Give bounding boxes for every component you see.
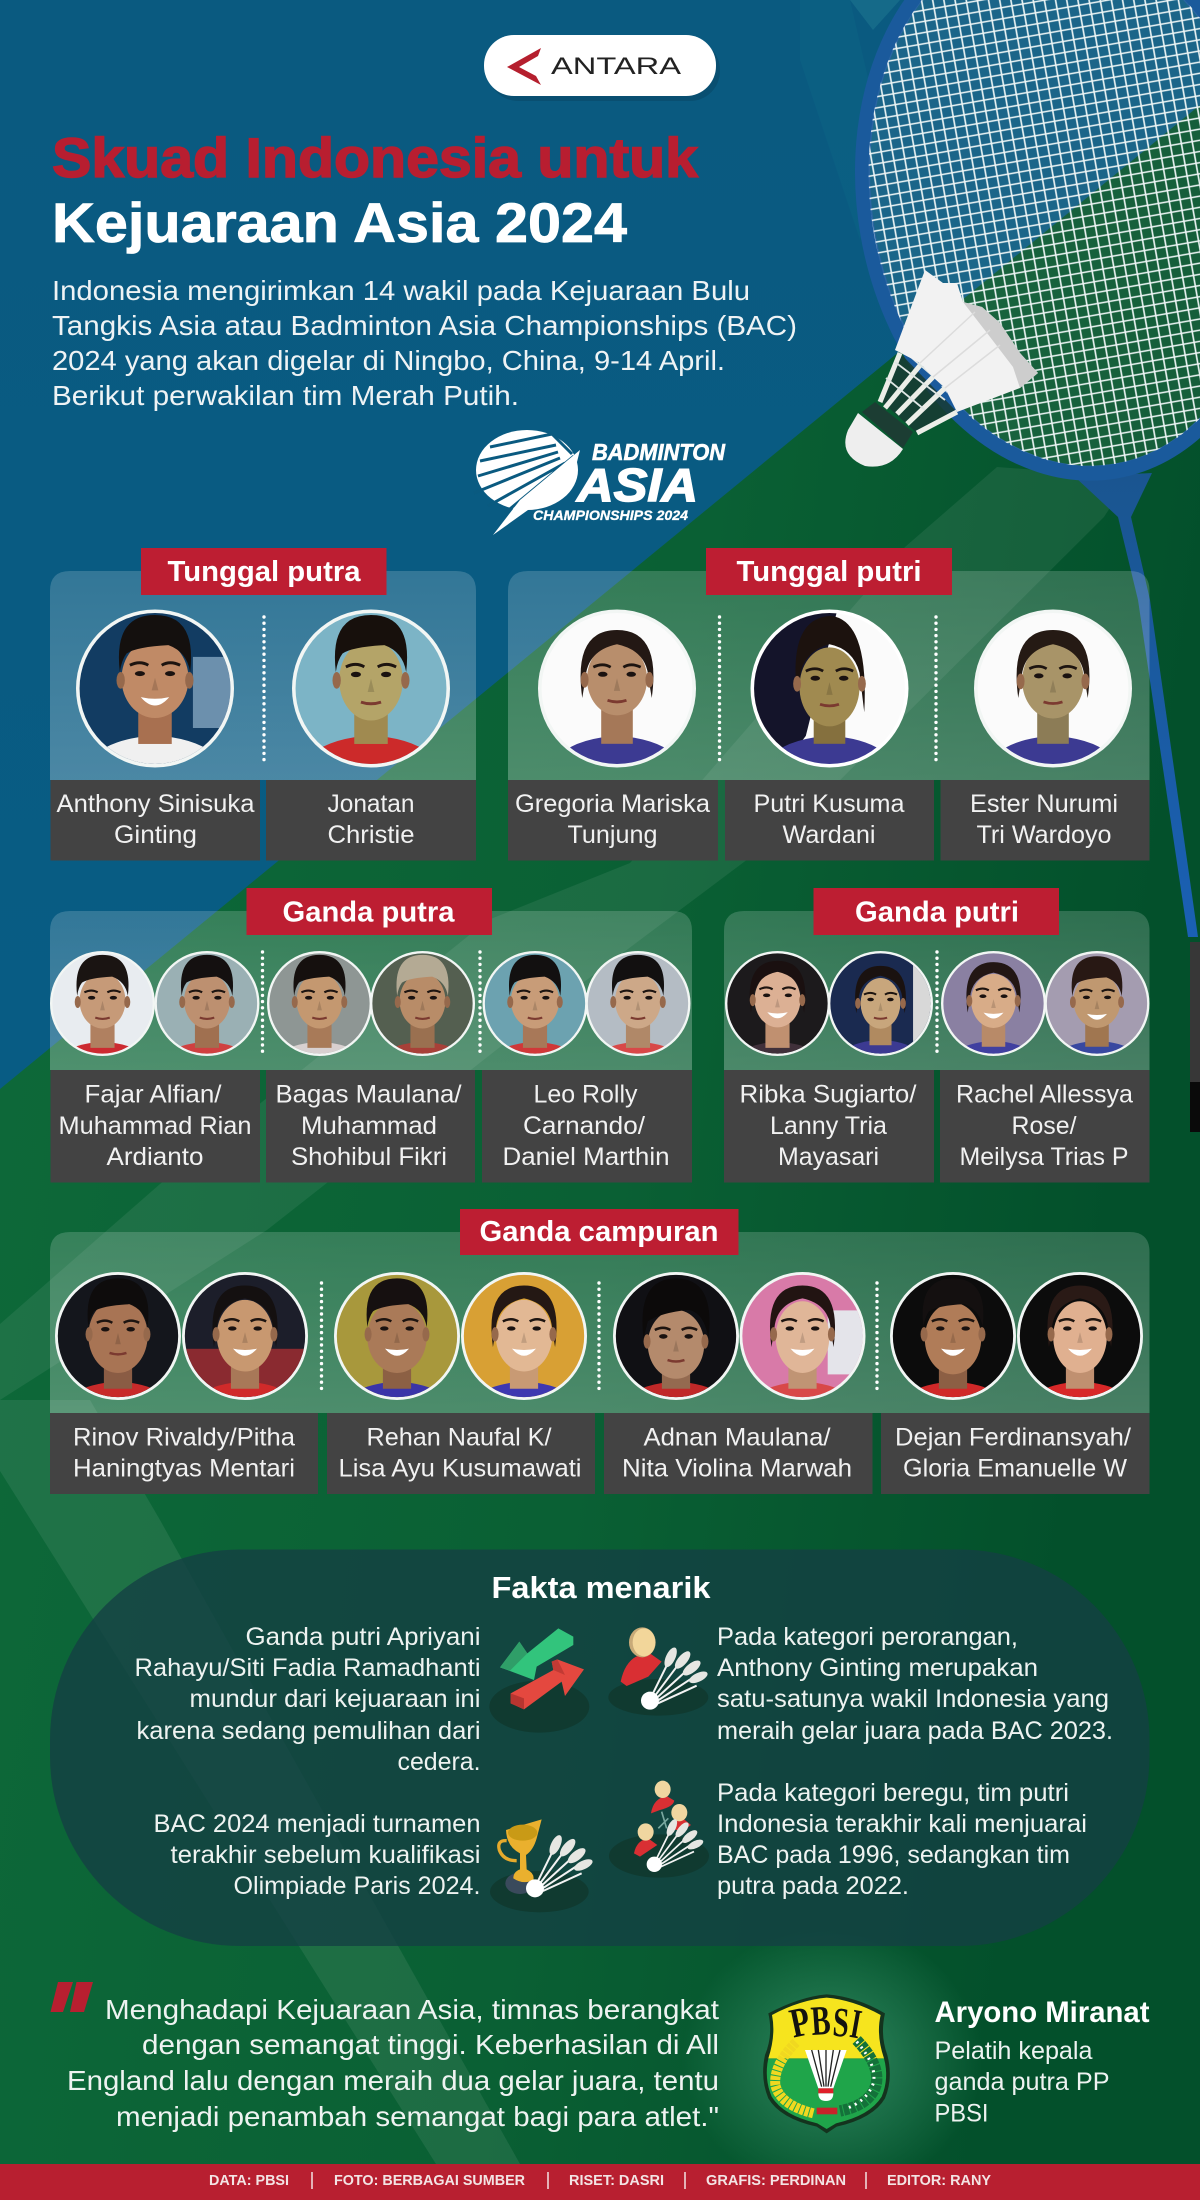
panel: Tunggal putri	[508, 548, 1150, 860]
intro text: 2024 yang akan digelar di Ningbo, China, 9-14 April.	[52, 345, 725, 376]
quote text: Menghadapi Kejuaraan Asia, timnas berangkat	[105, 1994, 719, 2025]
title: Skuad Indonesia untuk	[52, 126, 699, 189]
name: Rachel Allessya Rose / Meilysa Trias P: Meilysa Trias P	[960, 1143, 1128, 1171]
name: Rehan Naufal K / Lisa Ayu Kusumawati	[327, 1413, 595, 1494]
name: Adnan Maulana / Nita Violina Marwah	[604, 1413, 872, 1494]
icon: ANTARA chevron	[507, 48, 541, 85]
name: Putri Kusuma Wardani: Putri Kusuma	[754, 790, 905, 818]
footer credits	[0, 2164, 1200, 2200]
photo: Fajar Alfian	[50, 951, 155, 1066]
name: Anthony Sinisuka Ginting	[50, 780, 260, 860]
logo: PBSI: I	[847, 2001, 865, 2048]
photo: Daniel Marthin	[586, 951, 690, 1066]
dividers	[720, 617, 936, 760]
photo: Rinov Rivaldy	[55, 1272, 181, 1410]
title	[52, 126, 699, 254]
panel: Ganda putra	[50, 888, 692, 1182]
fact: Apriyani: Rahayu/Siti Fadia Ramadhanti	[134, 1654, 480, 1682]
logo wordmark: ANTARA	[551, 53, 681, 80]
name: Jonatan Christie: Jonatan	[328, 790, 414, 818]
fact: BAC 2024: Olimpiade Paris 2024.	[234, 1872, 480, 1900]
photo: Gloria Emanuelle Widjaja	[1017, 1272, 1143, 1410]
panel: Ganda putri	[724, 888, 1150, 1182]
photo: Leo Rolly Carnando	[482, 951, 588, 1066]
photo: Bagas Maulana	[267, 951, 372, 1066]
fact: Apriyani: karena sedang pemulihan dari	[136, 1717, 480, 1745]
name: Ribka Sugiarto / Lanny Tria Mayasari	[724, 1070, 934, 1182]
logo: PBSI: B	[809, 1998, 832, 2045]
badge: Ganda putra	[246, 888, 492, 935]
name: Adnan Maulana / Nita Violina Marwah: Adnan Maulana/	[644, 1424, 831, 1452]
fact: Apriyani: cedera.	[398, 1748, 480, 1776]
racket	[800, 0, 1200, 1132]
name: Ribka Sugiarto / Lanny Tria Mayasari: Lanny Tria	[770, 1112, 887, 1140]
photo: Ester Nurumi Tri Wardoyo	[974, 610, 1132, 768]
photo: Adnan Maulana	[613, 1272, 739, 1410]
dividers	[262, 952, 480, 1053]
badge: Tunggal putra: Tunggal putra	[168, 556, 361, 588]
photo: Nita Violina Marwah	[740, 1272, 866, 1410]
name: Ester Nurumi Tri Wardoyo: Tri Wardoyo	[976, 821, 1112, 849]
name: Adnan Maulana / Nita Violina Marwah: Nita Violina Marwah	[622, 1454, 852, 1482]
speaker: ganda putra PP	[934, 2068, 1110, 2096]
photo: Meilysa Trias Puspitasari	[1044, 951, 1150, 1064]
logo: PBSI	[763, 1994, 890, 2133]
logo: Badminton Asia Championships	[474, 430, 725, 535]
speaker: PBSI	[934, 2100, 988, 2128]
logo: ANTARA	[484, 35, 720, 101]
photo: Pitha Haningtyas Mentari	[182, 1272, 308, 1410]
name: Dejan Ferdinansyah / Gloria Emanuelle W	[881, 1413, 1150, 1494]
fact: Apriyani	[134, 1623, 480, 1776]
panel: Fakta menarik	[50, 1550, 1150, 1946]
name: Rinov Rivaldy / Pitha Haningtyas Mentari: Rinov Rivaldy/Pitha	[73, 1424, 295, 1452]
logo: PBSI: P	[786, 1998, 814, 2047]
name: Gregoria Mariska Tunjung: Gregoria Mariska	[515, 790, 710, 818]
badge: Ganda putri	[814, 888, 1059, 935]
logo: Badminton Asia Championships: CHAMPIONSHIPS 2024	[533, 507, 688, 523]
name: Rachel Allessya Rose / Meilysa Trias P: Rachel Allessya	[956, 1080, 1133, 1108]
name: Gregoria Mariska Tunjung: Tunjung	[568, 821, 658, 849]
fact: BAC 2024	[154, 1810, 481, 1900]
fact: Anthony Ginting: Anthony Ginting merupakan	[717, 1654, 1038, 1682]
fact: Anthony Ginting: meraih gelar juara pada BAC 2023.	[717, 1717, 1113, 1745]
name: Anthony Sinisuka Ginting: Anthony Sinisuka	[56, 790, 255, 818]
badge: Ganda putra: Ganda putra	[282, 896, 455, 928]
logo: Badminton Asia Championships: BADMINTON	[592, 439, 725, 465]
icon: quotation mark	[50, 1982, 93, 2012]
icon: player and shuttlecock	[608, 1627, 709, 1716]
photo: Lisa Ayu Kusumawati	[461, 1272, 587, 1410]
name: Jonatan Christie	[266, 780, 476, 860]
name: Ribka Sugiarto / Lanny Tria Mayasari: Ribka Sugiarto/	[740, 1080, 917, 1108]
fact: team title: Indonesia terakhir kali menjuarai	[717, 1810, 1087, 1838]
speaker: Aryono Miranat	[934, 1996, 1150, 2029]
name: Gregoria Mariska Tunjung	[508, 780, 718, 860]
name: Rinov Rivaldy / Pitha Haningtyas Mentari: Haningtyas Mentari	[73, 1454, 295, 1482]
fact: Apriyani: Ganda putri Apriyani	[246, 1623, 480, 1651]
intro text: Tangkis Asia atau Badminton Asia Championships (BAC)	[52, 310, 797, 341]
heading: Fakta menarik	[492, 1570, 711, 1605]
name: Leo Rolly Carnando / Daniel Marthin	[482, 1070, 692, 1182]
name: Leo Rolly Carnando / Daniel Marthin: Leo Rolly	[534, 1080, 638, 1108]
name: Bagas Maulana / Muhammad Shohibul Fikri: Shohibul Fikri	[291, 1143, 447, 1171]
name: Rehan Naufal K / Lisa Ayu Kusumawati: Lisa Ayu Kusumawati	[338, 1454, 582, 1482]
name: Ester Nurumi Tri Wardoyo	[940, 780, 1150, 860]
photo: Anthony Ginting	[76, 610, 234, 769]
photo: Rehan Naufal Kusharjanto	[334, 1272, 460, 1410]
name: Rachel Allessya Rose / Meilysa Trias P: Rose/	[1012, 1112, 1077, 1140]
name: Putri Kusuma Wardani	[725, 780, 934, 860]
name: Anthony Sinisuka Ginting: Ginting	[114, 821, 197, 849]
name: Dejan Ferdinansyah / Gloria Emanuelle W: Gloria Emanuelle W	[903, 1454, 1127, 1482]
fact: BAC 2024: BAC 2024 menjadi turnamen	[154, 1810, 481, 1838]
quote text	[67, 1994, 719, 2132]
fact: Apriyani: mundur dari kejuaraan ini	[190, 1685, 480, 1713]
footer credits: DATA: PBSI	[209, 2172, 289, 2189]
name: Dejan Ferdinansyah / Gloria Emanuelle W: Dejan Ferdinansyah/	[895, 1424, 1131, 1452]
name: Fajar Alfian / Muhammad Rian Ardianto: Muhammad Rian	[58, 1112, 252, 1140]
logo: PBSI: S	[831, 2000, 850, 2047]
name: Bagas Maulana / Muhammad Shohibul Fikri	[266, 1070, 475, 1182]
photo: Muhammad Shohibul Fikri	[370, 951, 475, 1066]
footer credits: EDITOR: RANY	[887, 2172, 991, 2189]
icon: swap arrows	[489, 1628, 589, 1733]
fact: Anthony Ginting	[717, 1623, 1113, 1745]
panel: Tunggal putra	[50, 548, 476, 860]
logo: Badminton Asia Championships: ASIA	[576, 459, 698, 511]
fact: team title: BAC pada 1996, sedangkan tim	[717, 1841, 1070, 1869]
photo: Muhammad Rian Ardianto	[154, 951, 260, 1066]
name: Ribka Sugiarto / Lanny Tria Mayasari: Mayasari	[778, 1143, 879, 1171]
badge: Tunggal putra	[141, 548, 386, 595]
icon: trophy and shuttlecock	[490, 1819, 594, 1912]
fact: Anthony Ginting: satu-satunya wakil Indonesia yang	[717, 1685, 1109, 1713]
title: Kejuaraan Asia 2024	[52, 191, 627, 254]
badge: Tunggal putri	[706, 548, 952, 595]
name: Fajar Alfian / Muhammad Rian Ardianto: Fajar Alfian/	[84, 1080, 222, 1108]
intro text	[52, 275, 797, 411]
footer credits: GRAFIS: PERDINAN	[706, 2172, 846, 2189]
quote text: menjadi penambah semangat bagi para atlet."	[116, 2101, 719, 2132]
intro text: Indonesia mengirimkan 14 wakil pada Kejuaraan Bulu	[52, 275, 750, 306]
photo: Jonatan Christie	[292, 610, 450, 769]
badge: Ganda campuran: Ganda campuran	[480, 1216, 718, 1248]
fact: team title	[717, 1779, 1087, 1900]
icon: team and shuttlecock	[609, 1781, 709, 1878]
name: Fajar Alfian / Muhammad Rian Ardianto: Ardianto	[106, 1143, 204, 1171]
fact: Anthony Ginting: Pada kategori perorangan,	[717, 1623, 1018, 1651]
name: Jonatan Christie: Christie	[328, 821, 414, 849]
shuttlecock	[845, 270, 1038, 467]
photo: Ribka Sugiarto	[725, 951, 830, 1066]
divider	[935, 952, 939, 1053]
dividers	[322, 1283, 877, 1389]
panel: Ganda campuran	[50, 1209, 1150, 1494]
badge: Tunggal putri: Tunggal putri	[736, 556, 922, 588]
name: Leo Rolly Carnando / Daniel Marthin: Carnando/	[523, 1112, 645, 1140]
photo: Rachel Allessya Rose	[941, 951, 1046, 1064]
quote text: England lalu dengan meraih dua gelar juara, tentu	[67, 2065, 719, 2096]
name: Rachel Allessya Rose / Meilysa Trias P	[940, 1070, 1150, 1182]
fact: team title: putra pada 2022.	[717, 1872, 909, 1900]
photo: Lanny Tria Mayasari	[828, 951, 933, 1062]
divider	[262, 617, 266, 760]
fact: team title: Pada kategori beregu, tim putri	[717, 1779, 1069, 1807]
photo: Dejan Ferdinansyah	[890, 1272, 1016, 1410]
name: Ester Nurumi Tri Wardoyo: Ester Nurumi	[970, 790, 1118, 818]
fact: BAC 2024: terakhir sebelum kualifikasi	[170, 1841, 480, 1869]
quote text: dengan semangat tinggi. Keberhasilan di All	[142, 2029, 719, 2060]
name: Rinov Rivaldy / Pitha Haningtyas Mentari	[50, 1413, 318, 1494]
name: Bagas Maulana / Muhammad Shohibul Fikri: Bagas Maulana/	[276, 1080, 462, 1108]
speaker: Pelatih kepala	[934, 2037, 1093, 2065]
footer credits: RISET: DASRI	[569, 2172, 664, 2189]
badge: Ganda campuran	[460, 1209, 738, 1255]
footer credits: FOTO: BERBAGAI SUMBER	[334, 2172, 525, 2189]
name: Rehan Naufal K / Lisa Ayu Kusumawati: Rehan Naufal K/	[366, 1424, 552, 1452]
speaker	[934, 1996, 1150, 2128]
name: Putri Kusuma Wardani: Wardani	[782, 821, 876, 849]
photo: Gregoria Mariska Tunjung	[538, 610, 696, 768]
photo: Putri Kusuma Wardani	[750, 610, 908, 768]
intro text: Berikut perwakilan tim Merah Putih.	[52, 380, 519, 411]
name: Bagas Maulana / Muhammad Shohibul Fikri: Muhammad	[301, 1112, 437, 1140]
name: Fajar Alfian / Muhammad Rian Ardianto	[50, 1070, 260, 1182]
name: Leo Rolly Carnando / Daniel Marthin: Daniel Marthin	[502, 1143, 670, 1171]
badge: Ganda putri: Ganda putri	[855, 896, 1019, 928]
